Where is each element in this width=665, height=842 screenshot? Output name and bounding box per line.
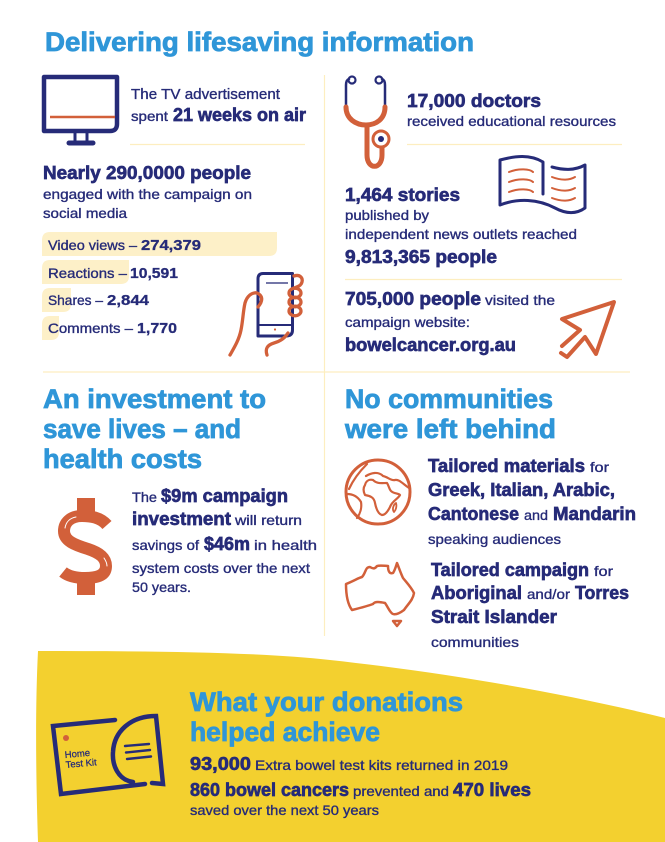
investment text: investment xyxy=(132,509,231,529)
panel: investment xyxy=(43,384,317,595)
donations results text: Extra bowel test kits returned in 2019 xyxy=(255,757,508,773)
bar chart: engagement by type: Reactions – xyxy=(48,265,127,281)
panel: TV advertisement xyxy=(44,77,306,143)
icon: home test kit envelope xyxy=(53,716,163,794)
bar chart: engagement by type: 10,591 xyxy=(130,265,178,282)
languages text xyxy=(428,456,636,547)
panel: donations banner xyxy=(36,651,665,842)
TV text xyxy=(131,86,306,125)
investment text xyxy=(132,486,317,595)
languages text: speaking audiences xyxy=(428,531,561,547)
doctors text xyxy=(407,91,616,129)
investment heading xyxy=(43,384,266,474)
icon: home test kit envelope: Test Kit xyxy=(65,757,98,771)
donations heading: What your donations xyxy=(190,687,463,717)
yellow banner background xyxy=(36,651,665,842)
languages text: Cantonese xyxy=(428,504,519,524)
Indigenous campaign text: Tailored campaign xyxy=(431,560,589,580)
donations results text: 93,000 xyxy=(190,754,251,774)
donations results text: prevented and xyxy=(353,783,449,799)
panel: communities xyxy=(344,384,636,650)
communities heading: were left behind xyxy=(344,414,556,444)
TV text: spent xyxy=(131,108,168,124)
panel: news stories xyxy=(345,156,585,267)
panel: doctors xyxy=(346,76,616,166)
title: Delivering lifesaving information xyxy=(45,27,474,57)
website text xyxy=(345,289,555,355)
icon: globe xyxy=(346,460,410,524)
donations results text: 860 bowel cancers xyxy=(190,780,349,800)
icon: television xyxy=(44,77,117,143)
donations results text: saved over the next 50 years xyxy=(190,802,379,818)
doctors text: received educational resources xyxy=(407,113,616,129)
bar chart: engagement by type: 1,770 xyxy=(137,320,177,337)
investment heading: health costs xyxy=(43,444,202,474)
website text: visited the xyxy=(485,292,555,308)
investment text: will return xyxy=(234,512,302,528)
bar chart: engagement by type: 2,844 xyxy=(107,292,150,309)
stories text: 9,813,365 people xyxy=(345,247,497,267)
icon: home test kit envelope: Home xyxy=(64,748,91,761)
Indigenous campaign text: and/or xyxy=(527,586,570,602)
donations results text xyxy=(190,754,531,818)
TV text: 21 weeks on air xyxy=(173,105,306,125)
bar chart: engagement by type: Comments – xyxy=(48,320,133,336)
bar chart: engagement by type: Video views – xyxy=(48,237,137,253)
stories text: 1,464 stories xyxy=(345,185,460,205)
investment text: $46m xyxy=(204,534,250,554)
website text: bowelcancer.org.au xyxy=(345,335,516,355)
social media heading: engaged with the campaign on xyxy=(43,186,252,202)
Indigenous campaign text: Strait Islander xyxy=(431,607,557,627)
icon: hand holding phone xyxy=(230,274,302,355)
donations heading xyxy=(190,687,463,747)
icon: map of Australia xyxy=(346,563,414,626)
investment heading: An investment to xyxy=(43,384,266,414)
languages text: Greek, Italian, Arabic, xyxy=(428,480,615,500)
panel: social media engagement xyxy=(42,163,302,355)
investment text: 50 years. xyxy=(132,579,191,595)
Indigenous campaign text: Aboriginal xyxy=(431,583,522,603)
social media heading: social media xyxy=(43,205,127,221)
doctors text: 17,000 doctors xyxy=(407,91,541,111)
investment text: savings of xyxy=(132,537,199,553)
languages text: Mandarin xyxy=(553,504,636,524)
investment heading: save lives – and xyxy=(43,414,241,444)
bar chart: engagement by type xyxy=(42,232,277,340)
bar chart: engagement by type: 274,379 xyxy=(141,237,201,254)
social media heading xyxy=(43,163,252,221)
panel: campaign website xyxy=(345,289,614,357)
icon: stethoscope xyxy=(346,76,389,166)
languages text: and xyxy=(524,507,548,523)
Indigenous campaign text: communities xyxy=(431,634,519,650)
investment text: The xyxy=(132,489,157,505)
Indigenous campaign text: Torres xyxy=(575,583,629,603)
communities heading: No communities xyxy=(345,384,553,414)
investment text: in health xyxy=(254,537,317,553)
stories text: independent news outlets reached xyxy=(345,226,577,242)
languages text: for xyxy=(590,459,609,475)
donations heading: helped achieve xyxy=(190,717,380,747)
languages text: Tailored materials xyxy=(428,456,585,476)
Indigenous campaign text: for xyxy=(594,563,613,579)
website text: campaign website: xyxy=(345,314,470,330)
icon: open book xyxy=(500,156,585,213)
stories text: published by xyxy=(345,207,429,223)
bar chart: engagement by type: Shares – xyxy=(48,292,103,308)
communities heading xyxy=(344,384,556,444)
donations results text: 470 lives xyxy=(453,780,531,800)
investment text: $9m campaign xyxy=(161,486,288,506)
icon: dollar sign xyxy=(63,498,107,595)
website text: 705,000 people xyxy=(345,289,481,309)
social media heading: Nearly 290,0000 people xyxy=(43,163,251,183)
Indigenous campaign text xyxy=(431,560,629,650)
investment text: system costs over the next xyxy=(132,560,310,576)
TV text: The TV advertisement xyxy=(131,86,281,103)
stories text xyxy=(345,185,577,267)
icon: cursor arrow xyxy=(561,302,614,357)
